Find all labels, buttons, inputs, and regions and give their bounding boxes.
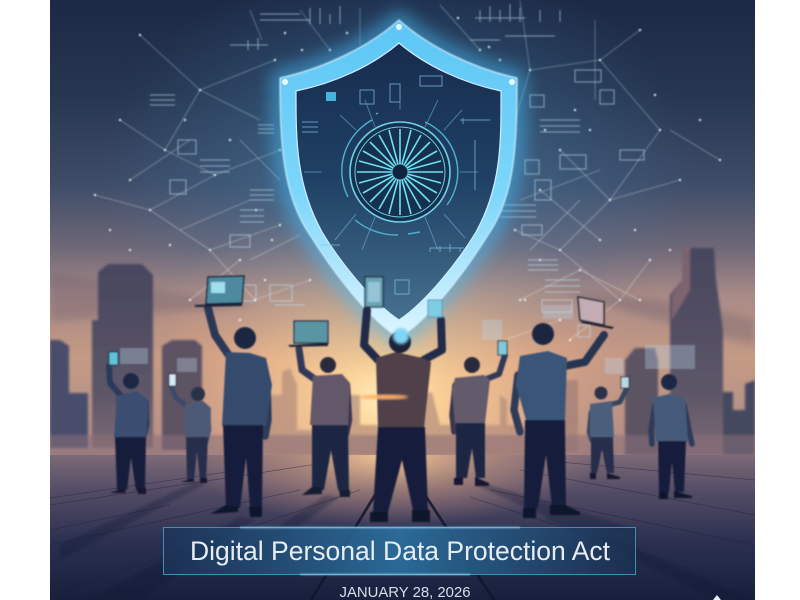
left arm — [651, 405, 655, 444]
torso — [590, 401, 614, 437]
right raised arm — [420, 320, 442, 362]
left building edge — [50, 340, 88, 448]
raised arm — [109, 366, 121, 396]
person small right with phone — [589, 377, 629, 479]
right arm — [684, 405, 692, 444]
hanging arm — [265, 385, 268, 436]
feet — [659, 491, 692, 499]
head — [320, 357, 336, 373]
feet — [110, 488, 146, 494]
head — [464, 357, 480, 373]
title banner — [164, 528, 636, 574]
ground plaza — [50, 455, 755, 600]
tablet right — [428, 300, 442, 317]
legs — [524, 420, 566, 508]
person far left with phone — [109, 352, 148, 494]
network nodes — [95, 18, 720, 340]
laptop — [194, 276, 244, 307]
person right-centre with phone — [452, 341, 507, 486]
tablet screen — [578, 297, 604, 325]
head — [661, 374, 677, 390]
figure shadows — [62, 482, 626, 548]
central perspective lines — [311, 495, 494, 600]
lower arm — [206, 410, 209, 442]
torso — [516, 351, 567, 420]
torso — [185, 401, 211, 437]
feet — [302, 487, 350, 497]
lower arm — [143, 402, 147, 440]
torso — [310, 374, 350, 425]
floating screens — [120, 305, 695, 374]
wheel rings — [350, 122, 450, 222]
small corner mark — [713, 595, 721, 600]
left raised arm — [364, 310, 378, 360]
head — [234, 327, 256, 349]
base haze — [50, 435, 755, 457]
central person with tablets — [360, 277, 442, 522]
legs — [115, 437, 146, 490]
feet — [210, 505, 262, 517]
hanging arm — [346, 385, 349, 434]
shield — [280, 20, 517, 338]
right mid tower — [625, 348, 658, 455]
large left tower — [92, 264, 153, 448]
phone — [621, 377, 629, 388]
head — [594, 386, 608, 400]
phone — [498, 341, 507, 355]
laptop — [288, 321, 328, 347]
floor seams — [50, 462, 755, 565]
raised arm — [208, 308, 230, 357]
shield corner lights — [285, 27, 512, 82]
shield band — [280, 20, 517, 338]
hanging arm — [452, 385, 455, 432]
raised arm — [171, 386, 187, 406]
torso — [452, 375, 490, 423]
shield interior — [296, 43, 501, 320]
tablet left — [365, 277, 383, 307]
tablet base — [580, 321, 614, 329]
legs — [658, 441, 686, 492]
laptop base — [194, 303, 242, 307]
hanging arm — [589, 412, 592, 441]
torso — [376, 352, 431, 428]
shield accent square — [326, 92, 336, 101]
head — [191, 387, 205, 401]
person small left with phone — [169, 374, 211, 483]
raised arm — [299, 349, 316, 380]
phone — [109, 352, 118, 365]
lens flare — [360, 394, 408, 400]
right edge buildings — [723, 380, 755, 455]
wheel hub — [392, 164, 408, 180]
laptop glow tile — [211, 282, 225, 293]
feet — [590, 473, 620, 479]
right tall tower — [670, 248, 723, 455]
near mid building — [563, 380, 578, 452]
outer arc segments — [342, 113, 458, 235]
laptop screen — [206, 276, 244, 304]
top banner highlight — [240, 528, 520, 574]
person left with laptop — [194, 276, 272, 517]
raised arm — [609, 388, 627, 405]
wheel spokes — [357, 129, 443, 215]
person left-centre with laptop — [288, 321, 350, 497]
far low-rise haze — [240, 368, 525, 455]
sunset sky — [50, 0, 755, 460]
feet — [523, 505, 580, 518]
head — [123, 373, 139, 389]
shield data details — [302, 76, 490, 294]
phone — [169, 374, 176, 386]
legs — [223, 425, 263, 508]
hanging arm — [514, 375, 520, 432]
head — [532, 323, 554, 345]
legs — [312, 425, 349, 490]
data network background — [95, 0, 720, 374]
feet — [181, 478, 207, 483]
legs — [591, 437, 614, 473]
legs — [456, 423, 485, 478]
raised arm — [565, 335, 604, 366]
torso — [114, 391, 148, 437]
laptop base — [288, 343, 328, 347]
title text: Digital Personal Data Protection Act — [190, 536, 610, 566]
feet — [370, 510, 430, 522]
city skyline — [50, 247, 755, 457]
tower lit face — [672, 247, 690, 320]
tablet — [578, 297, 614, 329]
person far right — [651, 374, 692, 499]
raised arm — [484, 355, 505, 380]
feet — [454, 477, 489, 486]
laptop screen — [294, 321, 328, 343]
torso — [222, 352, 272, 426]
chakra wheel — [342, 113, 458, 235]
legs — [186, 437, 208, 480]
network lines — [95, 0, 720, 340]
left mid tower — [162, 340, 202, 450]
torso — [653, 394, 688, 442]
legs — [373, 427, 428, 512]
person right with tablet — [514, 297, 614, 518]
shield glow — [280, 20, 517, 338]
head with light — [389, 331, 411, 353]
data widgets — [150, 4, 644, 337]
